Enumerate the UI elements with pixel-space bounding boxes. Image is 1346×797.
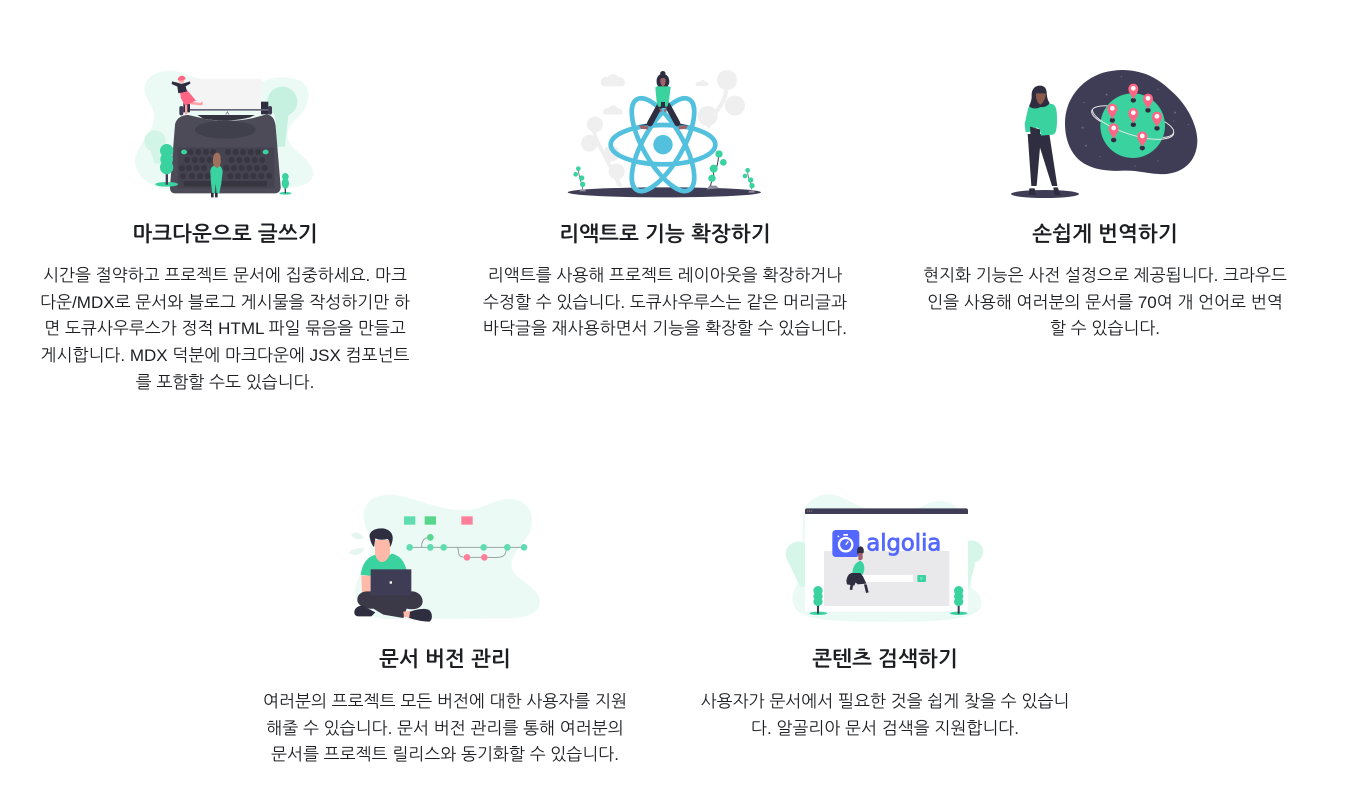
text: 마크다운 설명: 게시합니다. MDX 덕분에 마크다운에 JSX 컴포넌트 <box>41 346 409 365</box>
text: 번역 설명 <box>923 266 1287 338</box>
text: 마크다운 설명: 다운/MDX로 문서와 블로그 게시물을 작성하기만 하 <box>40 293 410 312</box>
text: 리액트 설명: 바닥글을 재사용하면서 기능을 확장할 수 있습니다. <box>483 319 847 338</box>
text: 버전 관리 설명: 문서를 프로젝트 릴리스와 동기화할 수 있습니다. <box>271 745 619 764</box>
text: 검색 설명: 다. 알골리아 문서 검색을 지원합니다. <box>751 719 1019 738</box>
heading: 마크다운으로 글쓰기: 마크다운으로 글쓰기 <box>132 223 318 246</box>
text: 번역 설명: 현지화 기능은 사전 설정으로 제공됩니다. 크라우드 <box>923 266 1287 285</box>
heading: 문서 버전 관리: 문서 버전 관리 <box>379 648 511 671</box>
icon: react atom illustration <box>568 70 761 198</box>
heading: 리액트로 기능 확장하기: 리액트로 기능 확장하기 <box>559 223 771 246</box>
heading: 콘텐츠 검색하기: 콘텐츠 검색하기 <box>812 648 958 671</box>
text: 버전 관리 설명: 해줄 수 있습니다. 문서 버전 관리를 통해 여러분의 <box>266 719 624 738</box>
text: 검색 설명 <box>701 692 1069 738</box>
icon: translation globe illustration <box>1011 70 1198 198</box>
icon: algolia search illustration <box>786 494 983 622</box>
text: 버전 관리 설명 <box>263 692 627 764</box>
icon: version control illustration <box>349 494 540 622</box>
text: 마크다운 설명: 면 도큐사우루스가 정적 HTML 파일 묶음을 만들고 <box>44 319 406 338</box>
text: 리액트 설명: 수정할 수 있습니다. 도큐사우루스는 같은 머리글과 <box>483 293 847 312</box>
text: 번역 설명: 인을 사용해 여러분의 문서를 70여 개 언어로 번역 <box>927 293 1283 312</box>
text: algolia logo: algolia <box>866 529 941 557</box>
text: 검색 설명: 사용자가 문서에서 필요한 것을 쉽게 찾을 수 있습니 <box>701 692 1069 711</box>
text: 번역 설명: 할 수 있습니다. <box>1050 319 1160 338</box>
text: 마크다운 설명: 를 포함할 수도 있습니다. <box>136 373 314 392</box>
text: 리액트 설명: 리액트를 사용해 프로젝트 레이아웃을 확장하거나 <box>488 266 842 285</box>
text: 마크다운 설명: 시간을 절약하고 프로젝트 문서에 집중하세요. 마크 <box>43 266 407 285</box>
heading: 손쉽게 번역하기: 손쉽게 번역하기 <box>1032 223 1178 246</box>
text: 마크다운 설명 <box>40 266 410 392</box>
icon: typewriter illustration <box>135 71 313 198</box>
text: 리액트 설명 <box>483 266 847 338</box>
text: 버전 관리 설명: 여러분의 프로젝트 모든 버전에 대한 사용자를 지원 <box>263 692 627 711</box>
